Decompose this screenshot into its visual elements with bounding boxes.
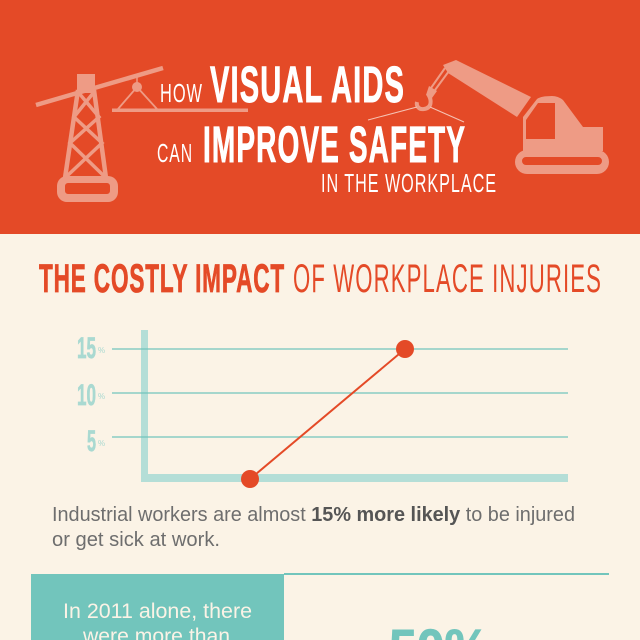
chart axes (141, 330, 568, 482)
data line (241, 340, 414, 488)
y-axis labels: 15 (77, 332, 96, 365)
y-axis labels: 10 (77, 379, 96, 412)
line chart: injury likelihood (77, 330, 568, 488)
y-axis labels (77, 332, 105, 458)
panel: 2011 statistic (31, 573, 609, 640)
text block: injury statistic (52, 504, 575, 551)
title: can: CAN (157, 140, 193, 168)
y-axis labels: 5 (87, 425, 96, 458)
y-axis labels: % (98, 346, 105, 355)
title: visual aids: VISUAL AIDS (210, 56, 405, 113)
chart gridlines (112, 349, 568, 437)
heading: costly impact: THE COSTLY IMPACT (39, 257, 285, 301)
icon: excavator crane (368, 60, 609, 174)
panel: 2011 statistic: In 2011 alone, there (63, 600, 252, 623)
y-axis labels: % (98, 392, 105, 401)
y-axis labels: % (98, 439, 105, 448)
panel: header banner (0, 0, 640, 234)
text block: injury statistic: or get sick at work. (52, 529, 220, 551)
icon: tower crane (36, 68, 248, 202)
title: in the workplace: IN THE WORKPLACE (321, 170, 497, 198)
text block: injury statistic: Industrial workers are almost 15% more likely to be injured (52, 504, 575, 526)
title: how: HOW (160, 80, 203, 108)
